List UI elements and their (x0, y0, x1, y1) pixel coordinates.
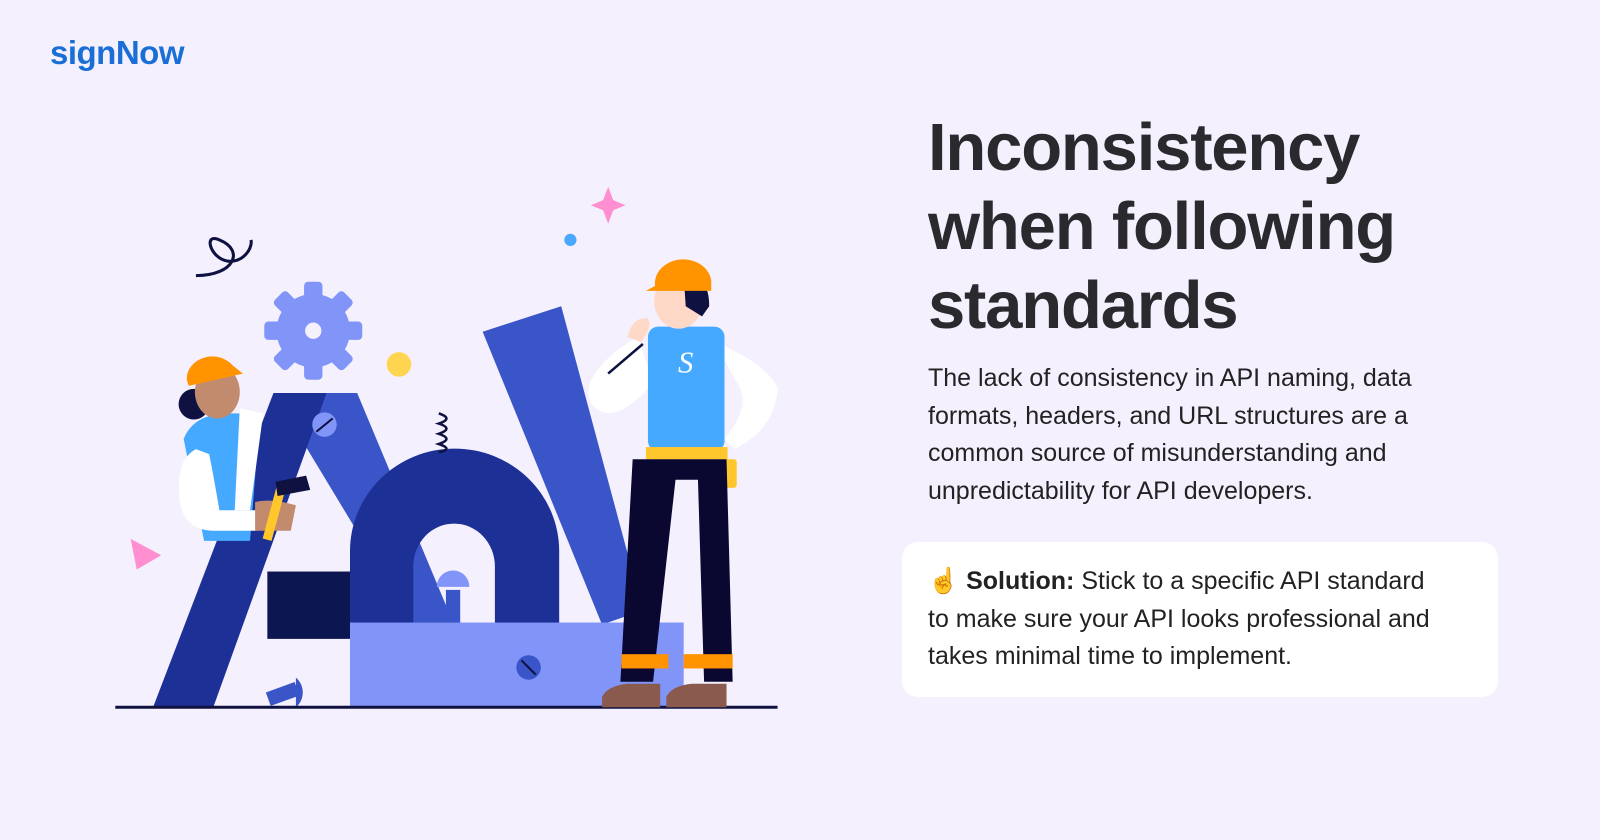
letters (115, 306, 778, 707)
logo: signNow (50, 34, 184, 71)
title: Inconsistency (928, 110, 1359, 185)
person: left worker (179, 356, 310, 541)
title (928, 110, 1395, 343)
title: standards (928, 268, 1237, 343)
icon: gear (264, 282, 362, 380)
title: when following (928, 189, 1395, 264)
person: right worker: S (678, 346, 693, 380)
person: right worker (589, 259, 778, 707)
text block: description: The lack of consistency in API naming, data formats, headers, and URL structures are a common source of misunderstanding and unpredictability for API developers. (928, 364, 1412, 504)
callout: solution (902, 542, 1498, 697)
decorations (131, 187, 626, 569)
callout: solution: ☝️ Solution: Stick to a specific API standard to make sure your API looks professional and takes minimal time to implement. (928, 567, 1430, 670)
